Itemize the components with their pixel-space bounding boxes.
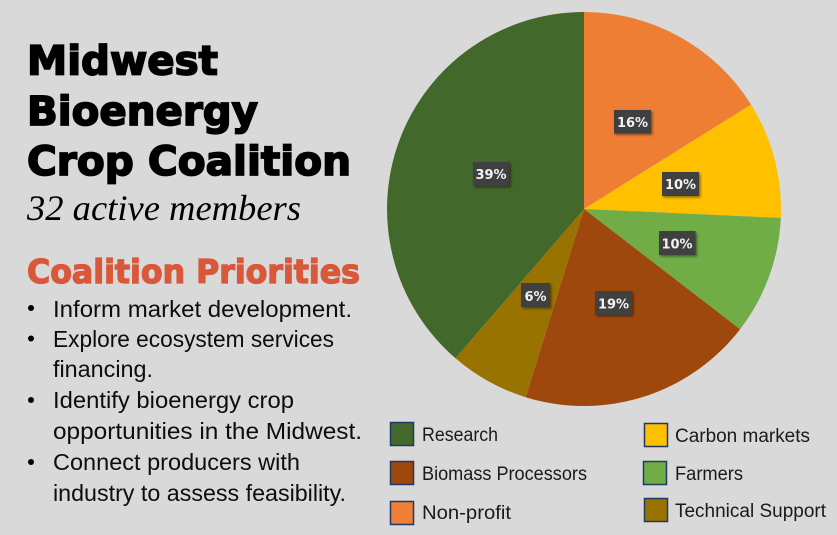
bullet list: priorities: financing.: [53, 356, 153, 382]
bullet list: priorities: Explore ecosystem services: [53, 326, 334, 352]
legend item: research: [390, 422, 498, 446]
slice: research 39%: [387, 12, 584, 358]
legend item: farmers: [644, 462, 743, 485]
data label: 6%: 6%: [524, 290, 547, 305]
bullet list: priorities: [28, 296, 362, 506]
legend item: farmers: Farmers: [675, 464, 743, 485]
data label: 10% carbon markets: [662, 172, 699, 196]
data label: 39%: 39%: [475, 168, 507, 183]
legend item: non-profit: [390, 502, 512, 524]
data label: 19%: [595, 291, 632, 315]
legend item: biomass processors: Biomass Processors: [422, 464, 587, 485]
legend item: carbon markets: Carbon markets: [675, 426, 810, 447]
data label: 16%: [614, 110, 651, 134]
subtitle: member count: 32 active members: [26, 188, 301, 228]
legend: [390, 422, 827, 524]
slice: non-profit 16%: [584, 12, 751, 209]
legend item: technical support: Technical Support: [675, 501, 827, 522]
slice: technical support 6%: [456, 209, 584, 397]
data label: 6%: [521, 283, 550, 307]
title: Midwest: [27, 36, 218, 84]
bullet list: priorities: Identify bioenergy crop: [53, 387, 294, 413]
title: Crop Coalition: [27, 137, 351, 185]
data label: 10% farmers: 10%: [661, 238, 693, 252]
slice: biomass processors 19%: [526, 209, 740, 406]
data label: 39%: [473, 162, 510, 186]
pie chart: [387, 12, 781, 406]
data label: 10% farmers: [659, 231, 696, 255]
data label: 10% carbon markets: 10%: [665, 178, 696, 193]
bullet list: priorities: industry to assess feasibility.: [53, 480, 346, 506]
heading: coalition priorities: Coalition Priorities: [27, 253, 360, 291]
bullet list: priorities: Connect producers with: [53, 449, 300, 475]
title: Bioenergy: [27, 87, 258, 135]
bullet list: priorities: Inform market development.: [53, 296, 352, 322]
slice: carbon markets 10%: [584, 105, 781, 218]
data label: 19%: 19%: [598, 298, 629, 312]
slice: farmers 10%: [584, 209, 781, 329]
legend item: non-profit: Non-profit: [422, 503, 512, 524]
data label: 16%: 16%: [617, 116, 648, 131]
bullet list: priorities: opportunities in the Midwest.: [53, 418, 362, 444]
legend item: research: Research: [422, 425, 498, 446]
title: [27, 36, 351, 185]
